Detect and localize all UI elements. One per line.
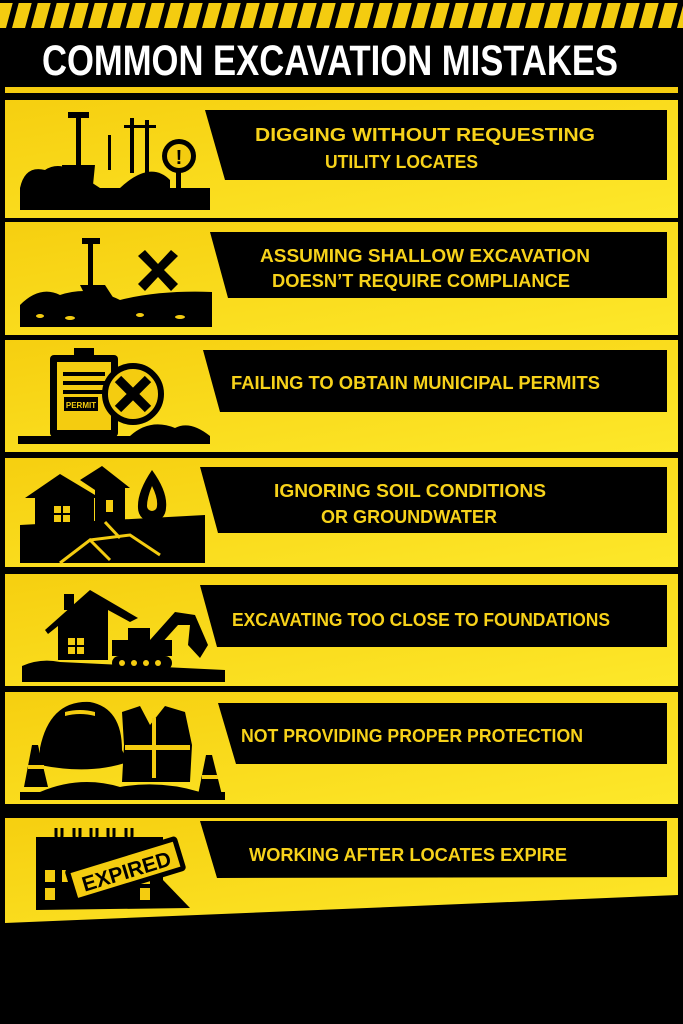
banner: FAILING TO OBTAIN MUNICIPAL PERMITS [231, 373, 600, 393]
icon: calendar with EXPIRED stamp: EXPIRED [79, 848, 174, 897]
hazard stripe header [0, 0, 683, 28]
panel 1: utility locates: ! [176, 147, 182, 169]
icon: clipboard permit with X [18, 348, 210, 444]
icon: hard hat, vest, cones [20, 702, 225, 800]
banner: UTILITY LOCATES [325, 152, 478, 172]
panel 2: shallow excavation [5, 222, 678, 335]
banner: OR GROUNDWATER [321, 507, 497, 527]
panel 5: foundations [5, 574, 678, 686]
panel 4: soil & groundwater [5, 458, 678, 567]
banner [200, 467, 667, 533]
icon: clipboard permit with X: PERMIT [66, 401, 96, 410]
banner: DOESN’T REQUIRE COMPLIANCE [272, 271, 570, 291]
banner: IGNORING SOIL CONDITIONS [274, 481, 546, 501]
panel 6: protection [5, 692, 678, 804]
icon: house and excavator [22, 590, 225, 682]
banner: ASSUMING SHALLOW EXCAVATION [260, 246, 590, 266]
banner [200, 585, 667, 647]
banner: WORKING AFTER LOCATES EXPIRE [249, 845, 567, 865]
panel 7: expired locates [5, 818, 678, 923]
icon: shovel with X [20, 238, 212, 327]
banner [200, 821, 667, 878]
panel 3: permits [5, 340, 678, 452]
banner [203, 350, 667, 412]
icon: calendar with EXPIRED stamp [36, 828, 190, 910]
banner: EXCAVATING TOO CLOSE TO FOUNDATIONS [232, 610, 610, 630]
icon: houses, drop, cracked soil [20, 466, 205, 563]
banner [205, 110, 667, 180]
banner: DIGGING WITHOUT REQUESTING [255, 125, 595, 145]
banner: NOT PROVIDING PROPER PROTECTION [241, 726, 583, 746]
icon: shovel, poles, warning [20, 112, 210, 210]
banner [210, 232, 667, 298]
banner [218, 703, 667, 764]
panel 1: utility locates [5, 100, 678, 218]
